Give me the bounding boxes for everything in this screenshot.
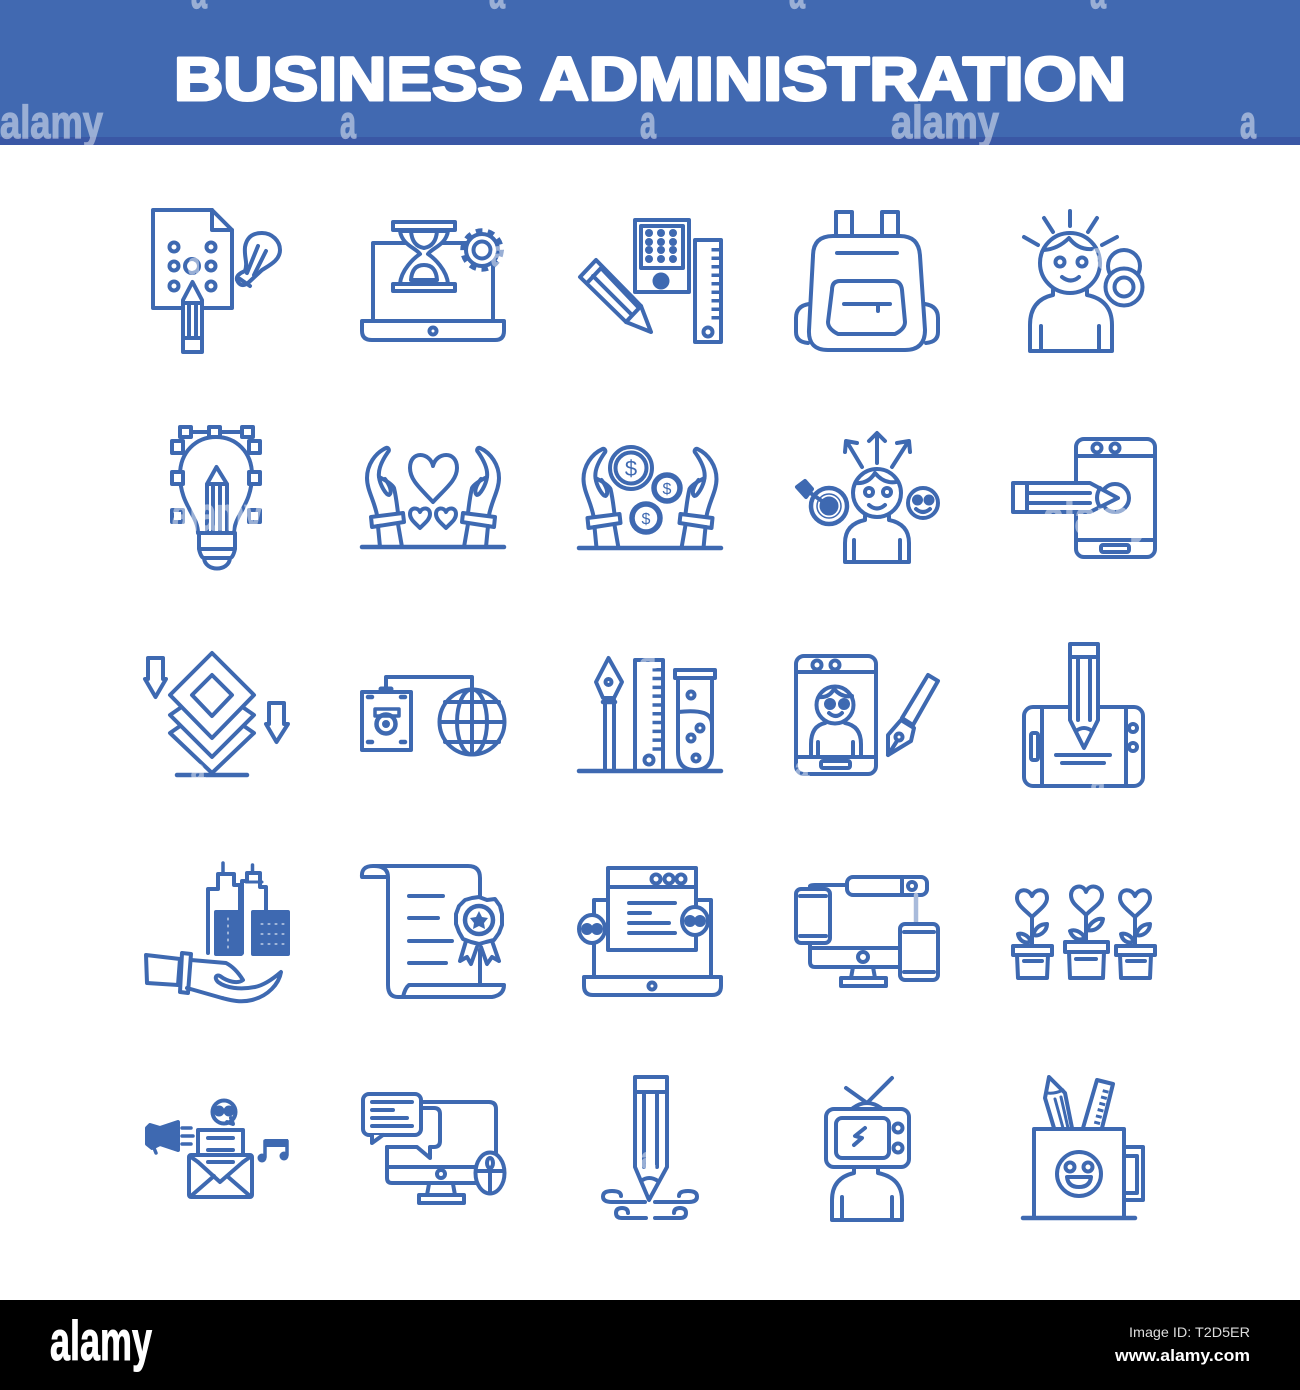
icon: backpack <box>796 212 938 350</box>
watermarks: a <box>640 642 656 675</box>
image id: Image ID: T2D5ER <box>1129 1324 1250 1340</box>
icon: document with idea bulb and pencil <box>153 210 280 352</box>
watermarks: alamy <box>1043 491 1151 543</box>
website: www.alamy.com <box>1114 1346 1250 1365</box>
icon: person with television head <box>826 1078 909 1220</box>
icon: connected devices <box>796 877 938 986</box>
watermarks: a <box>640 96 656 148</box>
icon: landscape phone with pencil <box>1024 644 1143 786</box>
icon: smartphone with pencil <box>1013 439 1155 557</box>
icon: light bulb with vector nodes and pencil <box>172 427 260 568</box>
title: BUSINESS ADMINISTRATION <box>174 45 1126 113</box>
watermarks: alamy <box>891 96 999 148</box>
icon: laptop with browser window <box>579 868 721 995</box>
icon: layers with down arrows <box>145 653 288 775</box>
footer bar <box>0 1300 1300 1390</box>
watermarks: a <box>188 248 200 281</box>
icon: person with rays and lock <box>1024 211 1142 351</box>
icon: smartphone selfie with pen <box>796 656 938 774</box>
icon: abacus tablet, pencil and ruler <box>580 220 721 342</box>
icon: pencil drawing path <box>603 1077 697 1218</box>
watermarks: alamy <box>172 488 262 540</box>
icon: heart flowers in pots <box>1013 887 1155 978</box>
icon: hands holding hearts <box>362 448 504 547</box>
icon: hard drive linked to globe <box>362 677 504 754</box>
icon: laptop with hourglass and gear <box>362 222 504 340</box>
alamy logo: alamy <box>50 1309 152 1372</box>
watermarks: a <box>491 233 506 274</box>
header banner <box>0 0 1300 145</box>
icon: mail with megaphone and music note <box>147 1100 288 1197</box>
icon: monitor with chat bubbles and mouse <box>363 1094 504 1203</box>
watermarks: a <box>1091 766 1105 799</box>
watermarks: a <box>795 752 809 785</box>
icon: certificate scroll with award ribbon <box>362 866 504 997</box>
watermarks: alamy <box>0 96 103 148</box>
watermarks: a <box>191 754 205 787</box>
icon: smiling mug with pencil and ruler <box>1023 1077 1143 1218</box>
icon: hands holding coins <box>579 447 721 548</box>
watermarks: a <box>641 1142 655 1175</box>
watermarks: a <box>1090 235 1105 276</box>
icon: person with arrows, target and smiley <box>797 433 938 562</box>
icon: fountain pen, ruler and test tube <box>579 658 721 771</box>
watermarks: a <box>340 96 356 148</box>
icon: hands holding coins: $ <box>663 481 672 498</box>
icon: hands holding coins: $ <box>625 456 637 481</box>
icon: hands holding coins: $ <box>642 511 651 528</box>
watermarks: a <box>1240 96 1256 148</box>
icon: hand holding city buildings <box>146 863 288 1001</box>
